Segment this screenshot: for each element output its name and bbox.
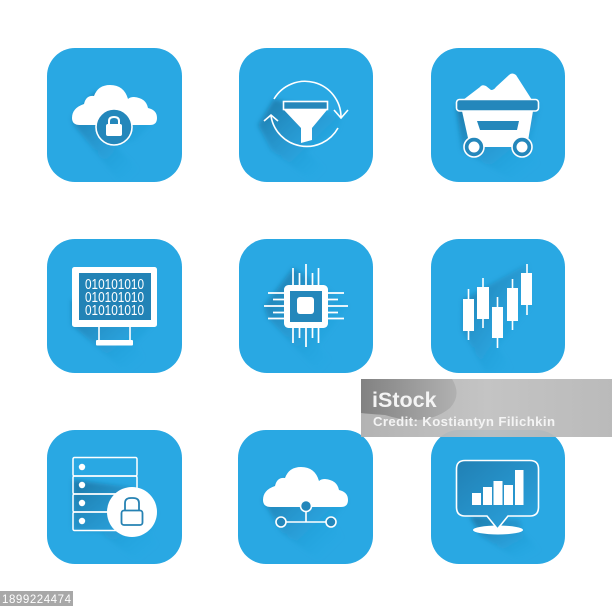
watermark logo: iStock — [372, 388, 437, 412]
icon: lock badge — [107, 487, 157, 537]
tile: mine cart — [431, 48, 565, 182]
icon: bar chart — [472, 470, 524, 505]
tile: microchip — [239, 239, 373, 373]
tile: cloud lock — [47, 48, 182, 182]
icon: location ellipse — [473, 526, 523, 534]
icon: speech bubble — [456, 460, 538, 529]
watermark credit: Credit: Kostiantyn Filichkin — [373, 414, 555, 429]
icon: wheels — [464, 137, 532, 157]
icon: padlock badge — [96, 109, 132, 145]
icon: cloud — [263, 467, 348, 507]
icon: monitor stand — [96, 327, 133, 346]
icon: cart window — [477, 121, 519, 130]
icon: candlesticks — [463, 264, 532, 348]
icon: network nodes — [276, 500, 336, 527]
icon: ore mound — [463, 74, 532, 100]
tile: cloud network — [238, 430, 373, 564]
binary text: 010101010 — [85, 277, 144, 293]
tile: binary monitor — [47, 239, 182, 373]
icon: server rack — [73, 458, 137, 530]
binary text: 010101010 — [85, 290, 144, 306]
binary text: 010101010 — [85, 303, 144, 319]
icon: monitor frame — [72, 267, 157, 327]
watermark banner — [361, 379, 612, 437]
icon: circular arrows — [264, 81, 348, 146]
icon: cart rim — [456, 100, 538, 111]
icon: cloud — [72, 85, 157, 125]
tile: funnel with arrows — [239, 48, 373, 182]
tile: chart speech bubble — [431, 430, 565, 564]
tile: candlestick chart — [431, 239, 565, 373]
icon: chip body — [284, 285, 328, 328]
icon: chip pins — [264, 264, 348, 347]
binary text — [85, 277, 144, 319]
image id tag: 1899224474 — [2, 594, 72, 606]
tile: server with lock — [47, 430, 182, 564]
icon: funnel — [284, 102, 328, 143]
icon: monitor screen — [79, 273, 151, 320]
icon: cart body — [462, 111, 533, 147]
icon: chip core — [297, 297, 314, 314]
